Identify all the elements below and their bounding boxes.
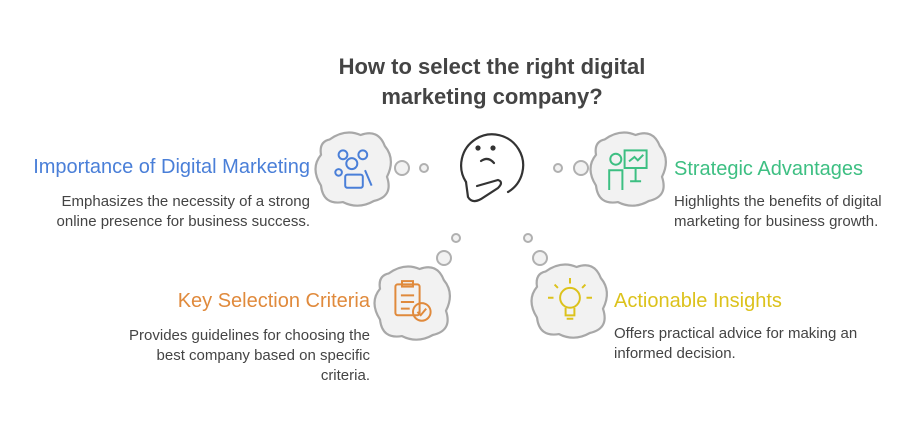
text: criteria: Provides guidelines for choosing the best company based on specific criteria. (129, 327, 370, 384)
heading: strategic: Strategic Advantages (674, 158, 863, 180)
text: strategic: Highlights the benefits of digital marketing for business growth. (674, 193, 882, 230)
title: marketing company? (381, 84, 603, 109)
text: importance: Emphasizes the necessity of a strong online presence for business success. (57, 193, 310, 230)
title: How to select the right digital (339, 54, 645, 79)
text: insights: Offers practical advice for making an informed decision. (614, 325, 857, 362)
icon: thinking face (461, 134, 523, 201)
heading: criteria: Key Selection Criteria (178, 290, 370, 312)
cloud: criteria (374, 267, 450, 340)
heading: importance: Importance of Digital Marketing (33, 156, 310, 178)
title (339, 54, 645, 109)
cloud: insights (532, 265, 607, 338)
heading: insights: Actionable Insights (614, 290, 782, 312)
cloud: importance (316, 133, 391, 206)
cloud: strategic (590, 133, 666, 206)
bubbles (395, 161, 588, 265)
